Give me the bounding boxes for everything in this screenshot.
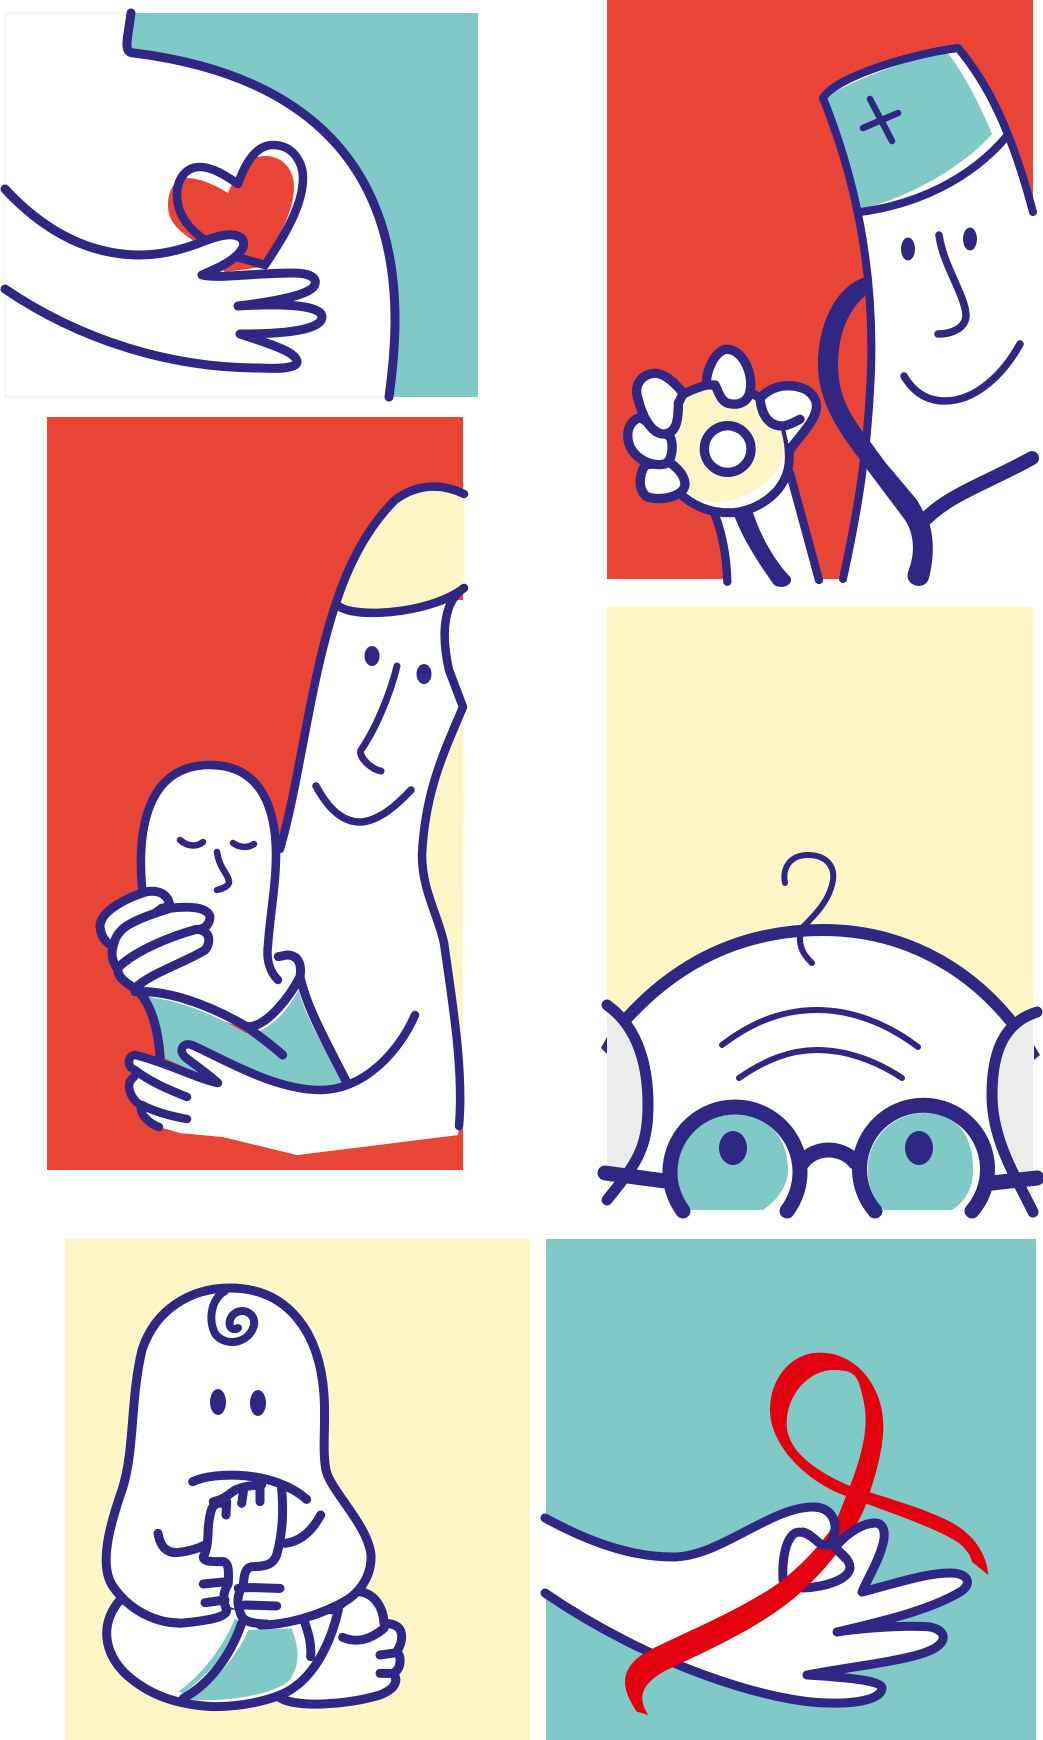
heart [168, 145, 303, 272]
head outline [627, 930, 1010, 1020]
mother nose [361, 666, 397, 771]
hair curl [784, 855, 833, 963]
small tube handle [715, 467, 820, 587]
panel: sitting baby [65, 1239, 530, 1740]
doctor nose [938, 235, 966, 334]
panel: grandparent with glasses [601, 607, 1040, 1212]
pupils [719, 1131, 933, 1165]
stethoscope tube [818, 277, 1032, 586]
panel: mother and baby [47, 417, 464, 1170]
head white shape [823, 48, 1033, 579]
head white [607, 930, 1033, 1210]
forehead wrinkles [722, 1010, 918, 1078]
cap teal fill [826, 52, 992, 210]
mother hair and side yellow [336, 487, 464, 1040]
hair curl [211, 1291, 254, 1342]
belly white shape [5, 13, 395, 397]
red background [47, 417, 463, 1170]
panel: doctor with stethoscope [607, 0, 1033, 587]
panel: pregnant belly with heart [5, 13, 478, 397]
red ribbon [625, 1353, 988, 1715]
mother head outline [280, 487, 464, 943]
teal background [5, 13, 478, 397]
thumb outline over ribbon [803, 1507, 875, 1558]
yellow background [607, 607, 1033, 1210]
cap cross [863, 99, 898, 141]
ears behind [601, 1037, 1040, 1060]
lower body and foot [107, 1592, 402, 1707]
hand holding heart [5, 189, 322, 368]
doctor smile [904, 344, 1020, 401]
hand white fill [545, 1507, 967, 1703]
chest piece disc and fingers [628, 349, 817, 513]
head and cap outline [823, 48, 1033, 579]
diaper and baby hand detail [100, 891, 347, 1099]
side hair outlines [607, 1005, 1037, 1212]
baby head [112, 765, 298, 1030]
yellow background [65, 1239, 530, 1740]
baby face [180, 840, 254, 890]
belly outline [127, 13, 395, 397]
mother smile [316, 786, 411, 822]
baby eyes [210, 1389, 266, 1416]
glasses frame [605, 1105, 1037, 1211]
mother white body [163, 600, 463, 1155]
doctor eyes [901, 228, 977, 260]
glasses lenses teal [675, 1113, 973, 1210]
mother arm and hand [130, 1010, 458, 1155]
hand outline [545, 1507, 967, 1703]
teal background [546, 1239, 1036, 1740]
mother side line lower [444, 943, 460, 1126]
grey sides [607, 1015, 1033, 1185]
mother eyes [364, 646, 432, 684]
panel: hand holding red ribbon [545, 1239, 1036, 1740]
raised foot, arms and hands [158, 1475, 321, 1624]
red background [607, 0, 1033, 579]
baby torso and head [106, 1288, 371, 1625]
